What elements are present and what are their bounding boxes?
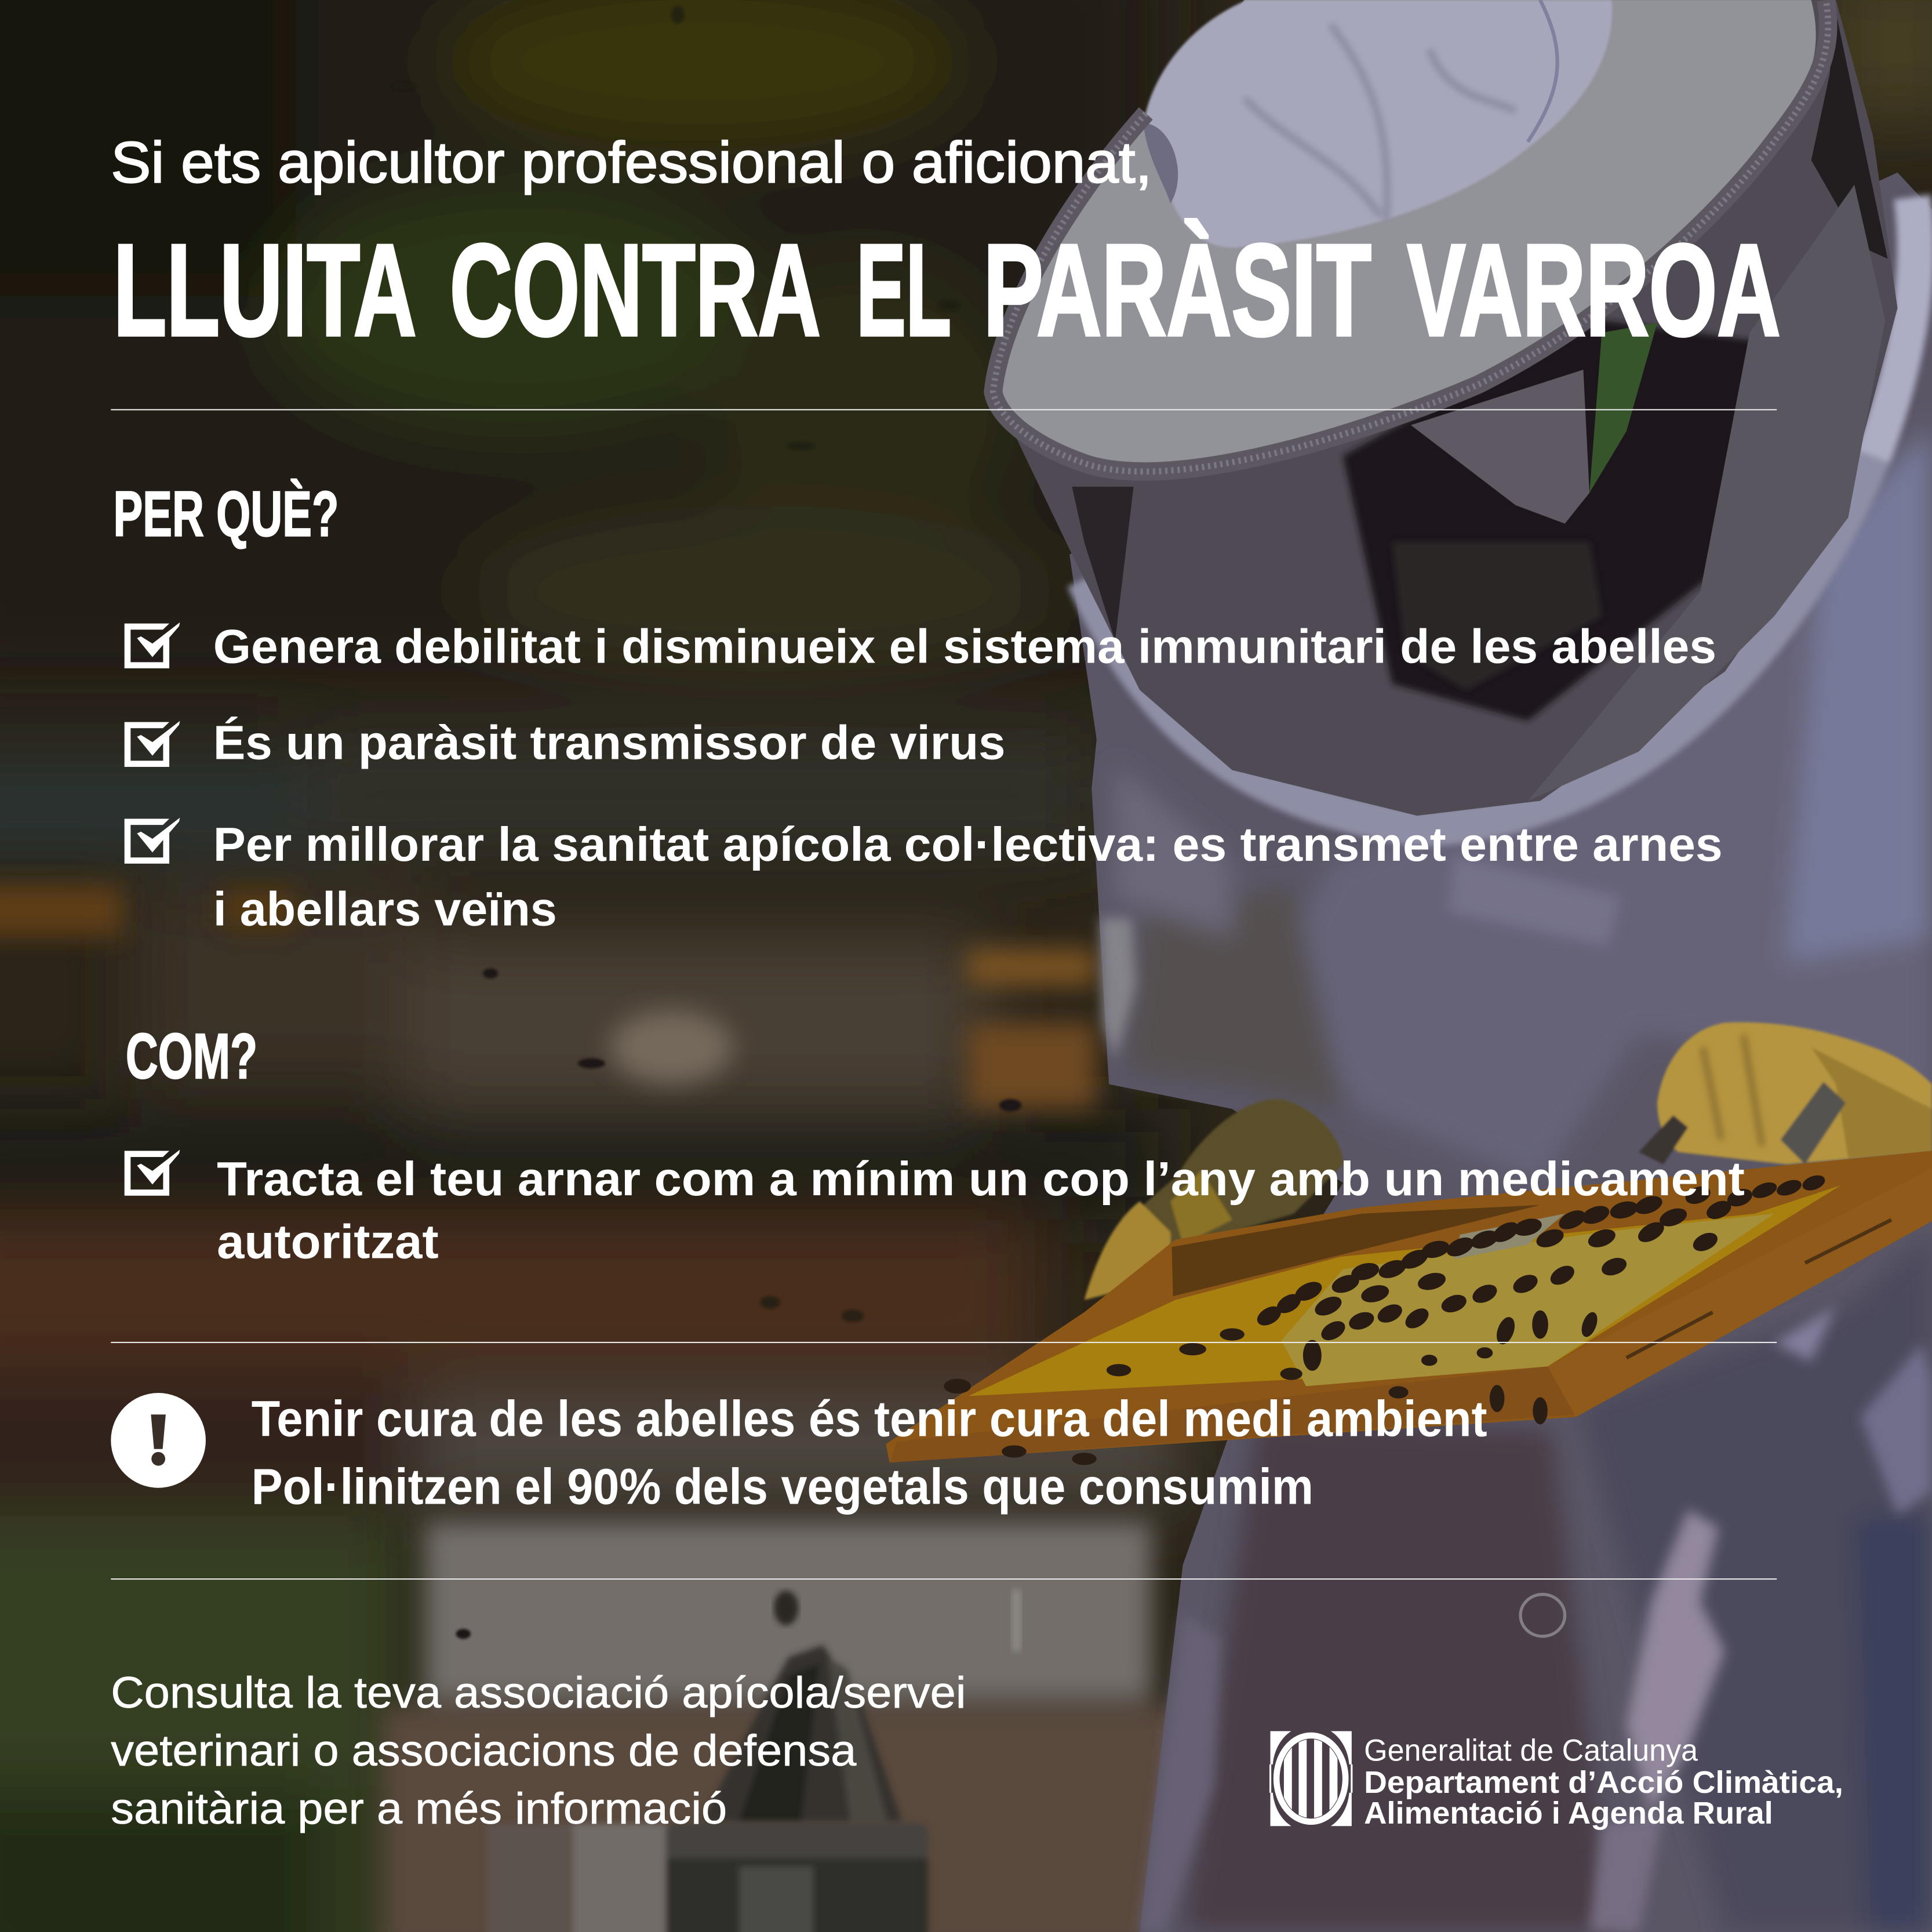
checklist item 1: Genera debilitat i disminueix el sistema immunitari de les abelles xyxy=(213,620,1716,674)
main title: EL xyxy=(856,217,951,363)
left glove xyxy=(1085,1099,1343,1300)
main title: LLUITA xyxy=(114,217,416,363)
checklist item 4 xyxy=(125,1149,1745,1268)
icon: exclamation mark xyxy=(111,1393,206,1488)
checklist item 3: Per millorar la sanitat apícola col·lectiva: es transmet entre arnes xyxy=(213,817,1723,871)
icon: checkbox xyxy=(125,818,180,864)
beekeeper veil xyxy=(1004,0,1897,816)
veil collar band xyxy=(1085,197,1916,828)
callout: bees and environment: Pol·linitzen el 90% dels vegetals que consumim xyxy=(252,1458,1314,1515)
icon: checkbox xyxy=(125,1149,180,1196)
icon: coat of arms xyxy=(1271,1731,1352,1830)
callout: bees and environment: Tenir cura de les abelles és tenir cura del medi ambient xyxy=(252,1391,1487,1447)
honeycomb frame with bees xyxy=(886,1151,1932,1465)
icon: checkbox xyxy=(125,721,180,767)
Generalitat logo xyxy=(1271,1731,1843,1831)
background photo: bees in flight xyxy=(392,6,1021,1639)
heading: com: COM? xyxy=(126,1021,257,1092)
footer advice text xyxy=(111,1668,966,1833)
checklist item 3: i abellars veïns xyxy=(213,882,557,936)
main title xyxy=(114,217,1781,363)
footer advice text: Consulta la teva associació apícola/servei xyxy=(111,1668,966,1718)
footer advice text: sanitària per a més informació xyxy=(111,1784,727,1833)
beekeeper suit xyxy=(1069,173,1932,1932)
main title: PARÀSIT xyxy=(983,217,1371,363)
Generalitat logo: Alimentació i Agenda Rural xyxy=(1364,1796,1773,1831)
checklist item 2: És un paràsit transmissor de virus xyxy=(213,715,1006,769)
right glove xyxy=(1639,1023,1932,1165)
checklist item 4: autoritzat xyxy=(217,1214,439,1268)
title intro line: Si ets apicultor professional o aficionat, xyxy=(111,131,1152,195)
smoker xyxy=(487,1645,928,1932)
icon: checkbox xyxy=(125,623,180,668)
footer advice text: veterinari o associacions de defensa xyxy=(111,1726,857,1775)
checklist item 3 xyxy=(125,817,1723,936)
Generalitat logo: Departament d’Acció Climàtica, xyxy=(1364,1765,1843,1800)
main title: CONTRA xyxy=(450,217,821,363)
beekeeper hat xyxy=(993,0,1828,471)
checklist item 4: Tracta el teu arnar com a mínim un cop l’any amb un medicament xyxy=(217,1152,1745,1206)
heading: per què: PER QUÈ? xyxy=(114,479,339,550)
callout: bees and environment xyxy=(111,1391,1487,1515)
Generalitat logo: Generalitat de Catalunya xyxy=(1364,1734,1698,1768)
